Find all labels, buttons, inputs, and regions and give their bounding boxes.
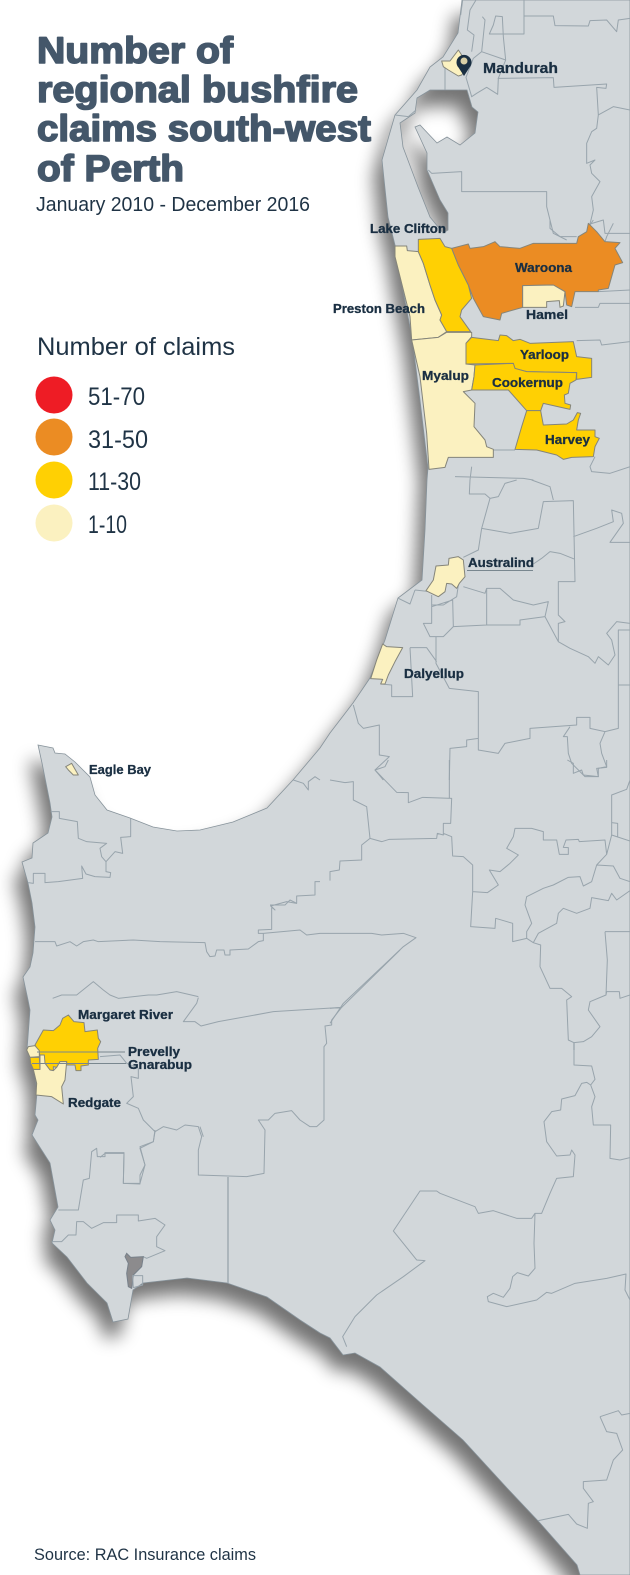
map labels: Redgate <box>68 1095 121 1110</box>
map labels <box>68 60 591 1110</box>
regions: Australind and Dalyellup <box>371 557 465 684</box>
region: Cookernup <box>472 363 577 411</box>
leader lines <box>32 570 533 1064</box>
map labels: Prevelly <box>128 1044 181 1059</box>
regions: Margaret River group <box>27 1015 101 1104</box>
map labels: Eagle Bay <box>89 762 152 777</box>
region: Margaret River <box>35 1015 101 1071</box>
map labels: Yarloop <box>520 347 569 362</box>
legend item: 51-70: 51-70 <box>88 383 145 411</box>
region: Waroona <box>452 223 623 320</box>
legend item: 31-50: 31-50 <box>88 426 148 454</box>
legend item: 11-30 <box>36 462 141 498</box>
legend item: 1-10 <box>36 504 127 542</box>
legend item: 51-70 <box>36 376 145 414</box>
map labels: Australind <box>468 555 534 570</box>
region: Hamel <box>523 285 565 307</box>
title: regional bushfire <box>37 69 358 110</box>
region: Prevelly <box>27 1046 39 1057</box>
map: inland water near Augusta <box>125 1253 143 1288</box>
legend item: 1-10: 1-10 <box>88 511 127 539</box>
map labels: Margaret River <box>78 1007 173 1022</box>
region: Eagle Bay <box>66 763 78 775</box>
map labels: Dalyellup <box>404 666 464 681</box>
map labels: Lake Clifton <box>370 221 446 236</box>
title <box>37 30 371 189</box>
map labels: Preston Beach <box>333 301 425 316</box>
map labels: Waroona <box>515 260 573 275</box>
map labels: Cookernup <box>492 375 563 390</box>
legend title: Number of claims <box>37 333 235 361</box>
title: claims south-west <box>37 108 371 149</box>
region: Harvey <box>515 411 599 459</box>
legend item: 31-50 <box>36 418 148 456</box>
subtitle: January 2010 - December 2016 <box>36 194 310 216</box>
region: Australind <box>426 557 465 597</box>
source note: Source: RAC Insurance claims <box>34 1545 256 1564</box>
region: Yarloop <box>466 335 592 379</box>
regions: Perth-Peel group <box>395 223 623 469</box>
map labels: Gnarabup <box>128 1057 192 1072</box>
region: Dalyellup <box>371 644 403 684</box>
map labels: Harvey <box>545 432 591 447</box>
map labels: Hamel <box>526 307 568 322</box>
title: of Perth <box>37 148 184 189</box>
title: Number of <box>37 30 234 71</box>
region: Mandurah <box>442 50 468 76</box>
region: Lake Clifton <box>418 238 472 332</box>
icon: map pin at Mandurah <box>456 55 472 76</box>
region: Preston Beach <box>395 246 447 340</box>
map labels: Myalup <box>422 368 469 383</box>
map labels: Mandurah <box>483 60 558 77</box>
legend <box>36 333 235 542</box>
region: Gnarabup <box>30 1057 40 1069</box>
region: Myalup <box>412 332 493 469</box>
legend item: 11-30: 11-30 <box>88 468 141 496</box>
region: Redgate <box>33 1055 67 1104</box>
